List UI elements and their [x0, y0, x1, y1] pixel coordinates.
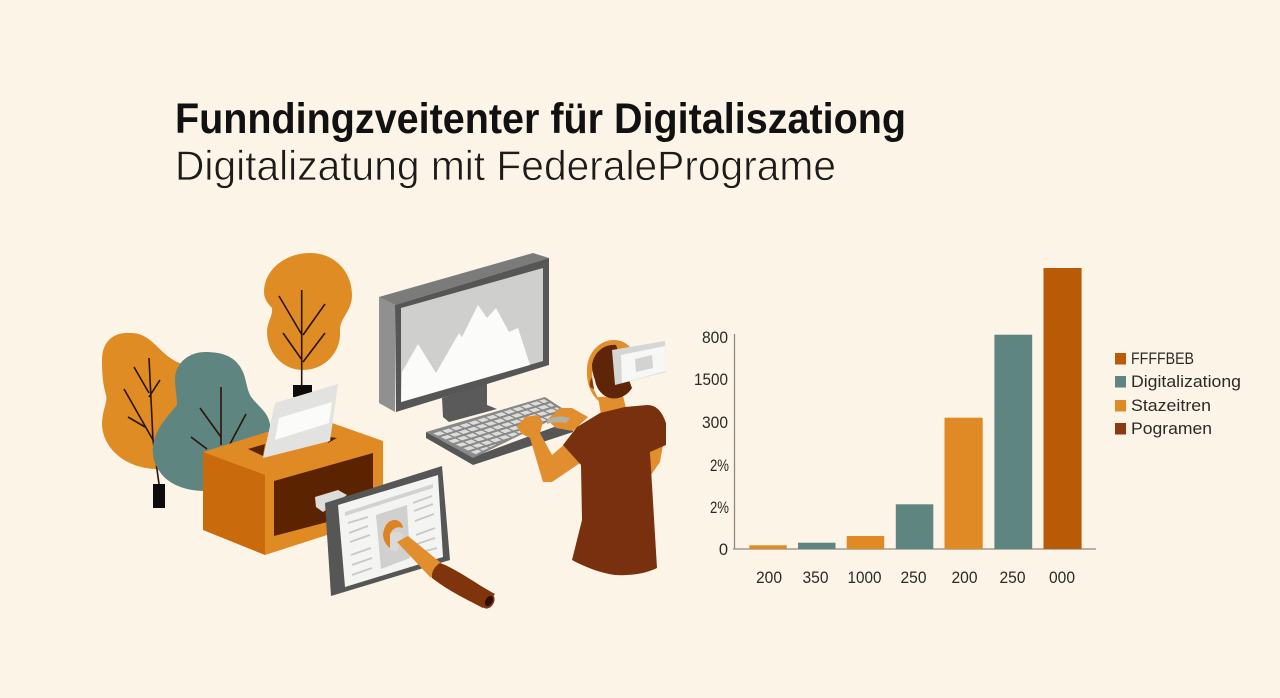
y axis labels: 2%	[710, 457, 729, 475]
legend item: Stazeitren: Stazeitren	[1131, 396, 1211, 415]
subtitle: Digitalizatung mit FederalePrograme	[175, 142, 836, 189]
x axis labels	[756, 569, 1075, 587]
head	[587, 340, 632, 402]
x axis labels: 1000	[848, 569, 882, 587]
icon: keyboard	[426, 397, 573, 465]
screen mountains	[401, 305, 530, 402]
near arm	[517, 415, 580, 482]
y axis labels: 300	[702, 414, 728, 432]
neck	[598, 396, 626, 415]
document panel	[376, 505, 410, 569]
y axis labels	[694, 329, 729, 559]
x axis labels: 200	[952, 569, 978, 587]
monitor stand	[442, 383, 497, 422]
legend item: Pogramen: Pogramen	[1131, 419, 1212, 438]
icon: desktop monitor	[379, 253, 549, 422]
cable, brown section	[432, 563, 495, 608]
far arm	[547, 408, 588, 431]
y axis labels: 1500	[694, 371, 728, 389]
icon: orange tree, left	[102, 333, 182, 508]
illustration: funding and digitalization scene	[102, 253, 666, 611]
icon: teal tree	[153, 352, 270, 491]
legend item: FFFFBEB: FFFFBEB	[1131, 349, 1194, 368]
legend	[1115, 349, 1241, 438]
ring	[390, 532, 403, 552]
y axis and baseline	[733, 334, 1096, 549]
cable, orange section	[397, 536, 441, 578]
icon: ballot box	[203, 384, 383, 555]
legend item: Digitalizationg: Digitalizationg	[1131, 372, 1241, 391]
paper in slot	[263, 384, 338, 458]
x axis labels: 250	[1000, 569, 1026, 587]
x axis labels: 000	[1049, 569, 1075, 587]
y axis labels: 2%	[710, 499, 729, 517]
x axis labels: 200	[756, 569, 782, 587]
bar chart	[694, 268, 1096, 587]
icon: orange tree, centre	[264, 253, 352, 397]
orange loop	[383, 520, 403, 548]
y axis labels: 800	[702, 329, 728, 347]
bars	[749, 268, 1082, 549]
title	[175, 95, 906, 189]
back arm	[650, 445, 663, 475]
connector	[315, 490, 347, 512]
figure: person at computer	[517, 340, 666, 575]
VR headset	[612, 341, 666, 385]
shirt	[563, 405, 666, 575]
heading: Funndingzveitenter für Digitaliszationg	[175, 95, 906, 143]
x axis labels: 350	[802, 569, 828, 587]
y axis labels: 0	[719, 541, 728, 559]
icon: tablet with document	[325, 466, 497, 611]
x axis labels: 250	[900, 569, 926, 587]
